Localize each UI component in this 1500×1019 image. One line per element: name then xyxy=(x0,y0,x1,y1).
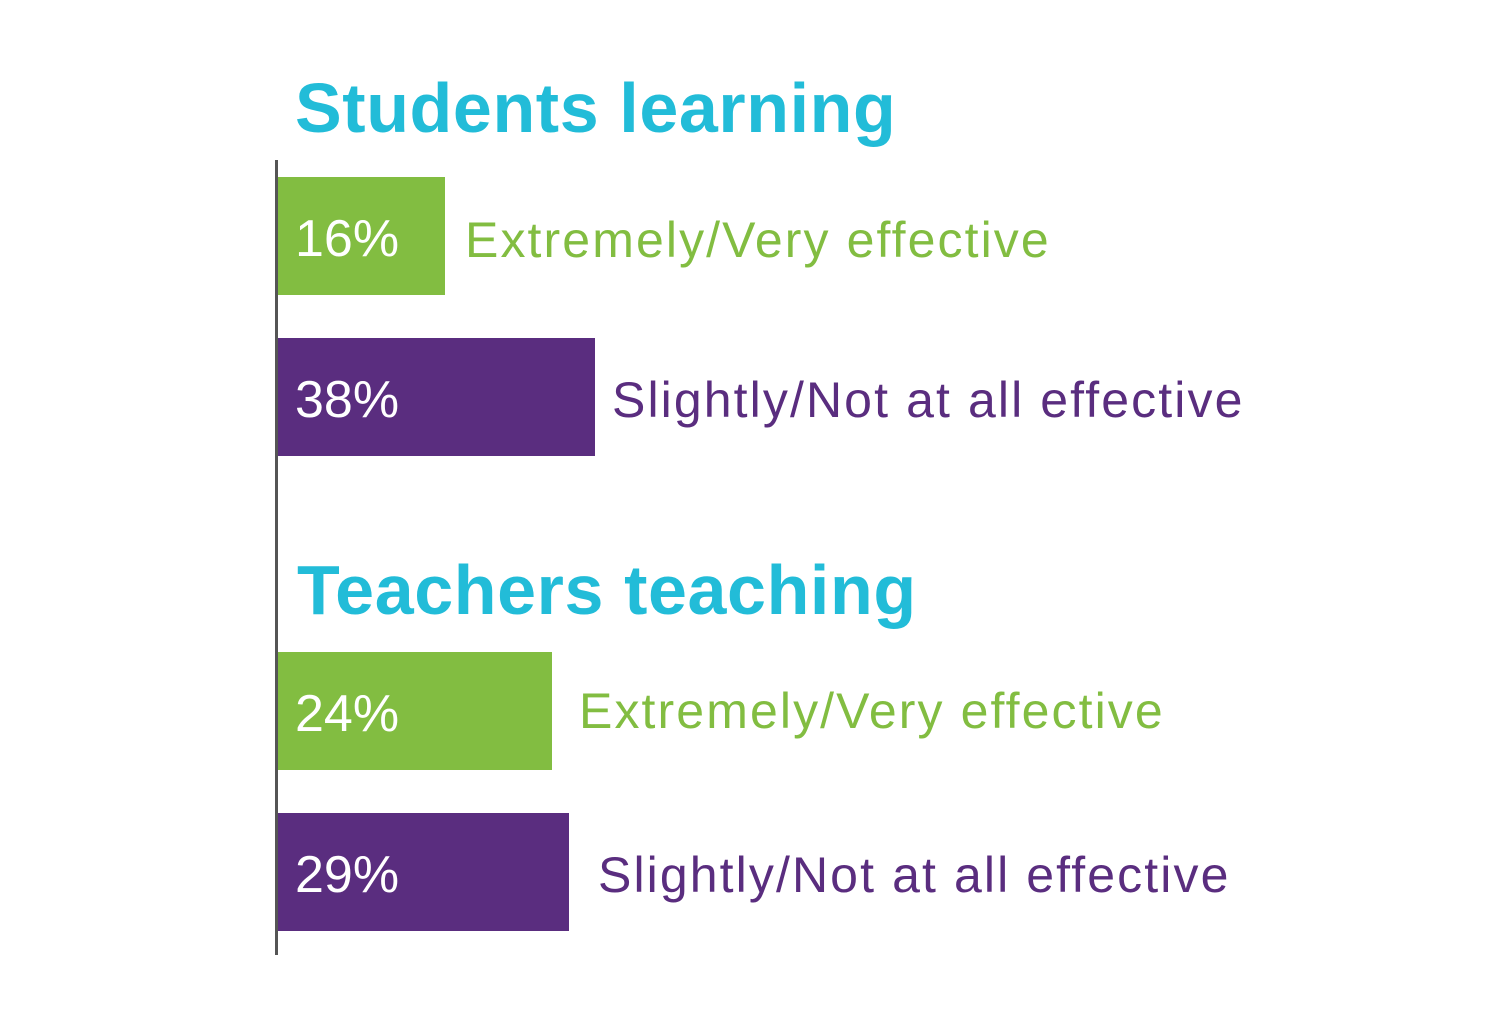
label: slightly effective: Slightly/Not at all effective xyxy=(612,372,1244,428)
bar: students 38%: 38% xyxy=(295,371,399,429)
bar: teachers 24% xyxy=(278,652,552,770)
bar: students 38% xyxy=(278,338,595,456)
bar: teachers 29%: 29% xyxy=(295,846,399,904)
label: slightly effective: Slightly/Not at all effective xyxy=(598,847,1230,903)
label: extremely effective: Extremely/Very effective xyxy=(465,212,1051,268)
bar: teachers 24%: 24% xyxy=(295,685,399,743)
heading: teachers teaching: Teachers teaching xyxy=(297,551,917,629)
heading: students learning: Students learning xyxy=(295,69,896,147)
label: extremely effective: Extremely/Very effective xyxy=(579,683,1165,739)
bar: students 16% xyxy=(278,177,445,295)
bar: teachers 29% xyxy=(278,813,569,931)
bar: students 16%: 16% xyxy=(295,210,399,268)
axis line xyxy=(275,160,278,955)
